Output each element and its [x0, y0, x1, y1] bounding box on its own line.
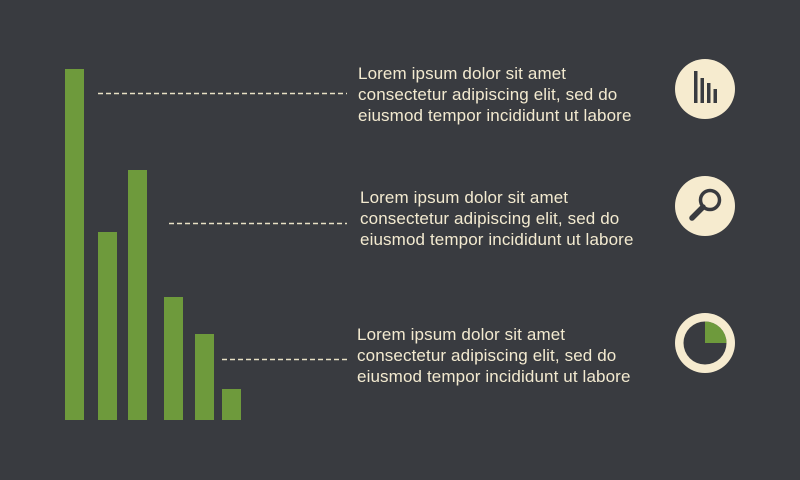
- bar 4: [164, 297, 183, 420]
- text block 3: eiusmod tempor incididunt ut labore: [357, 367, 631, 386]
- text block 3: consectetur adipiscing elit, sed do: [357, 346, 616, 365]
- icon: bar chart: [675, 59, 735, 119]
- leader line 3: [222, 358, 347, 360]
- bar 5: [195, 334, 214, 420]
- text block 3: [357, 325, 631, 386]
- bar chart: [65, 69, 241, 420]
- bar 6: [222, 389, 241, 420]
- bar 2: [98, 232, 117, 420]
- text block 3: Lorem ipsum dolor sit amet: [357, 325, 565, 344]
- icon: magnifier: [675, 176, 735, 236]
- text block 2: [360, 188, 634, 249]
- icon: pie ring: [675, 313, 735, 373]
- text block 1: consectetur adipiscing elit, sed do: [358, 85, 617, 104]
- text block 2: eiusmod tempor incididunt ut labore: [360, 230, 634, 249]
- text block 1: [358, 64, 632, 125]
- bar 3: [128, 170, 147, 420]
- text block 2: consectetur adipiscing elit, sed do: [360, 209, 619, 228]
- text block 2: Lorem ipsum dolor sit amet: [360, 188, 568, 207]
- text block 1: Lorem ipsum dolor sit amet: [358, 64, 566, 83]
- bar 1: [65, 69, 84, 420]
- leader line 2: [169, 222, 347, 224]
- text block 1: eiusmod tempor incididunt ut labore: [358, 106, 632, 125]
- leader line 1: [98, 92, 347, 94]
